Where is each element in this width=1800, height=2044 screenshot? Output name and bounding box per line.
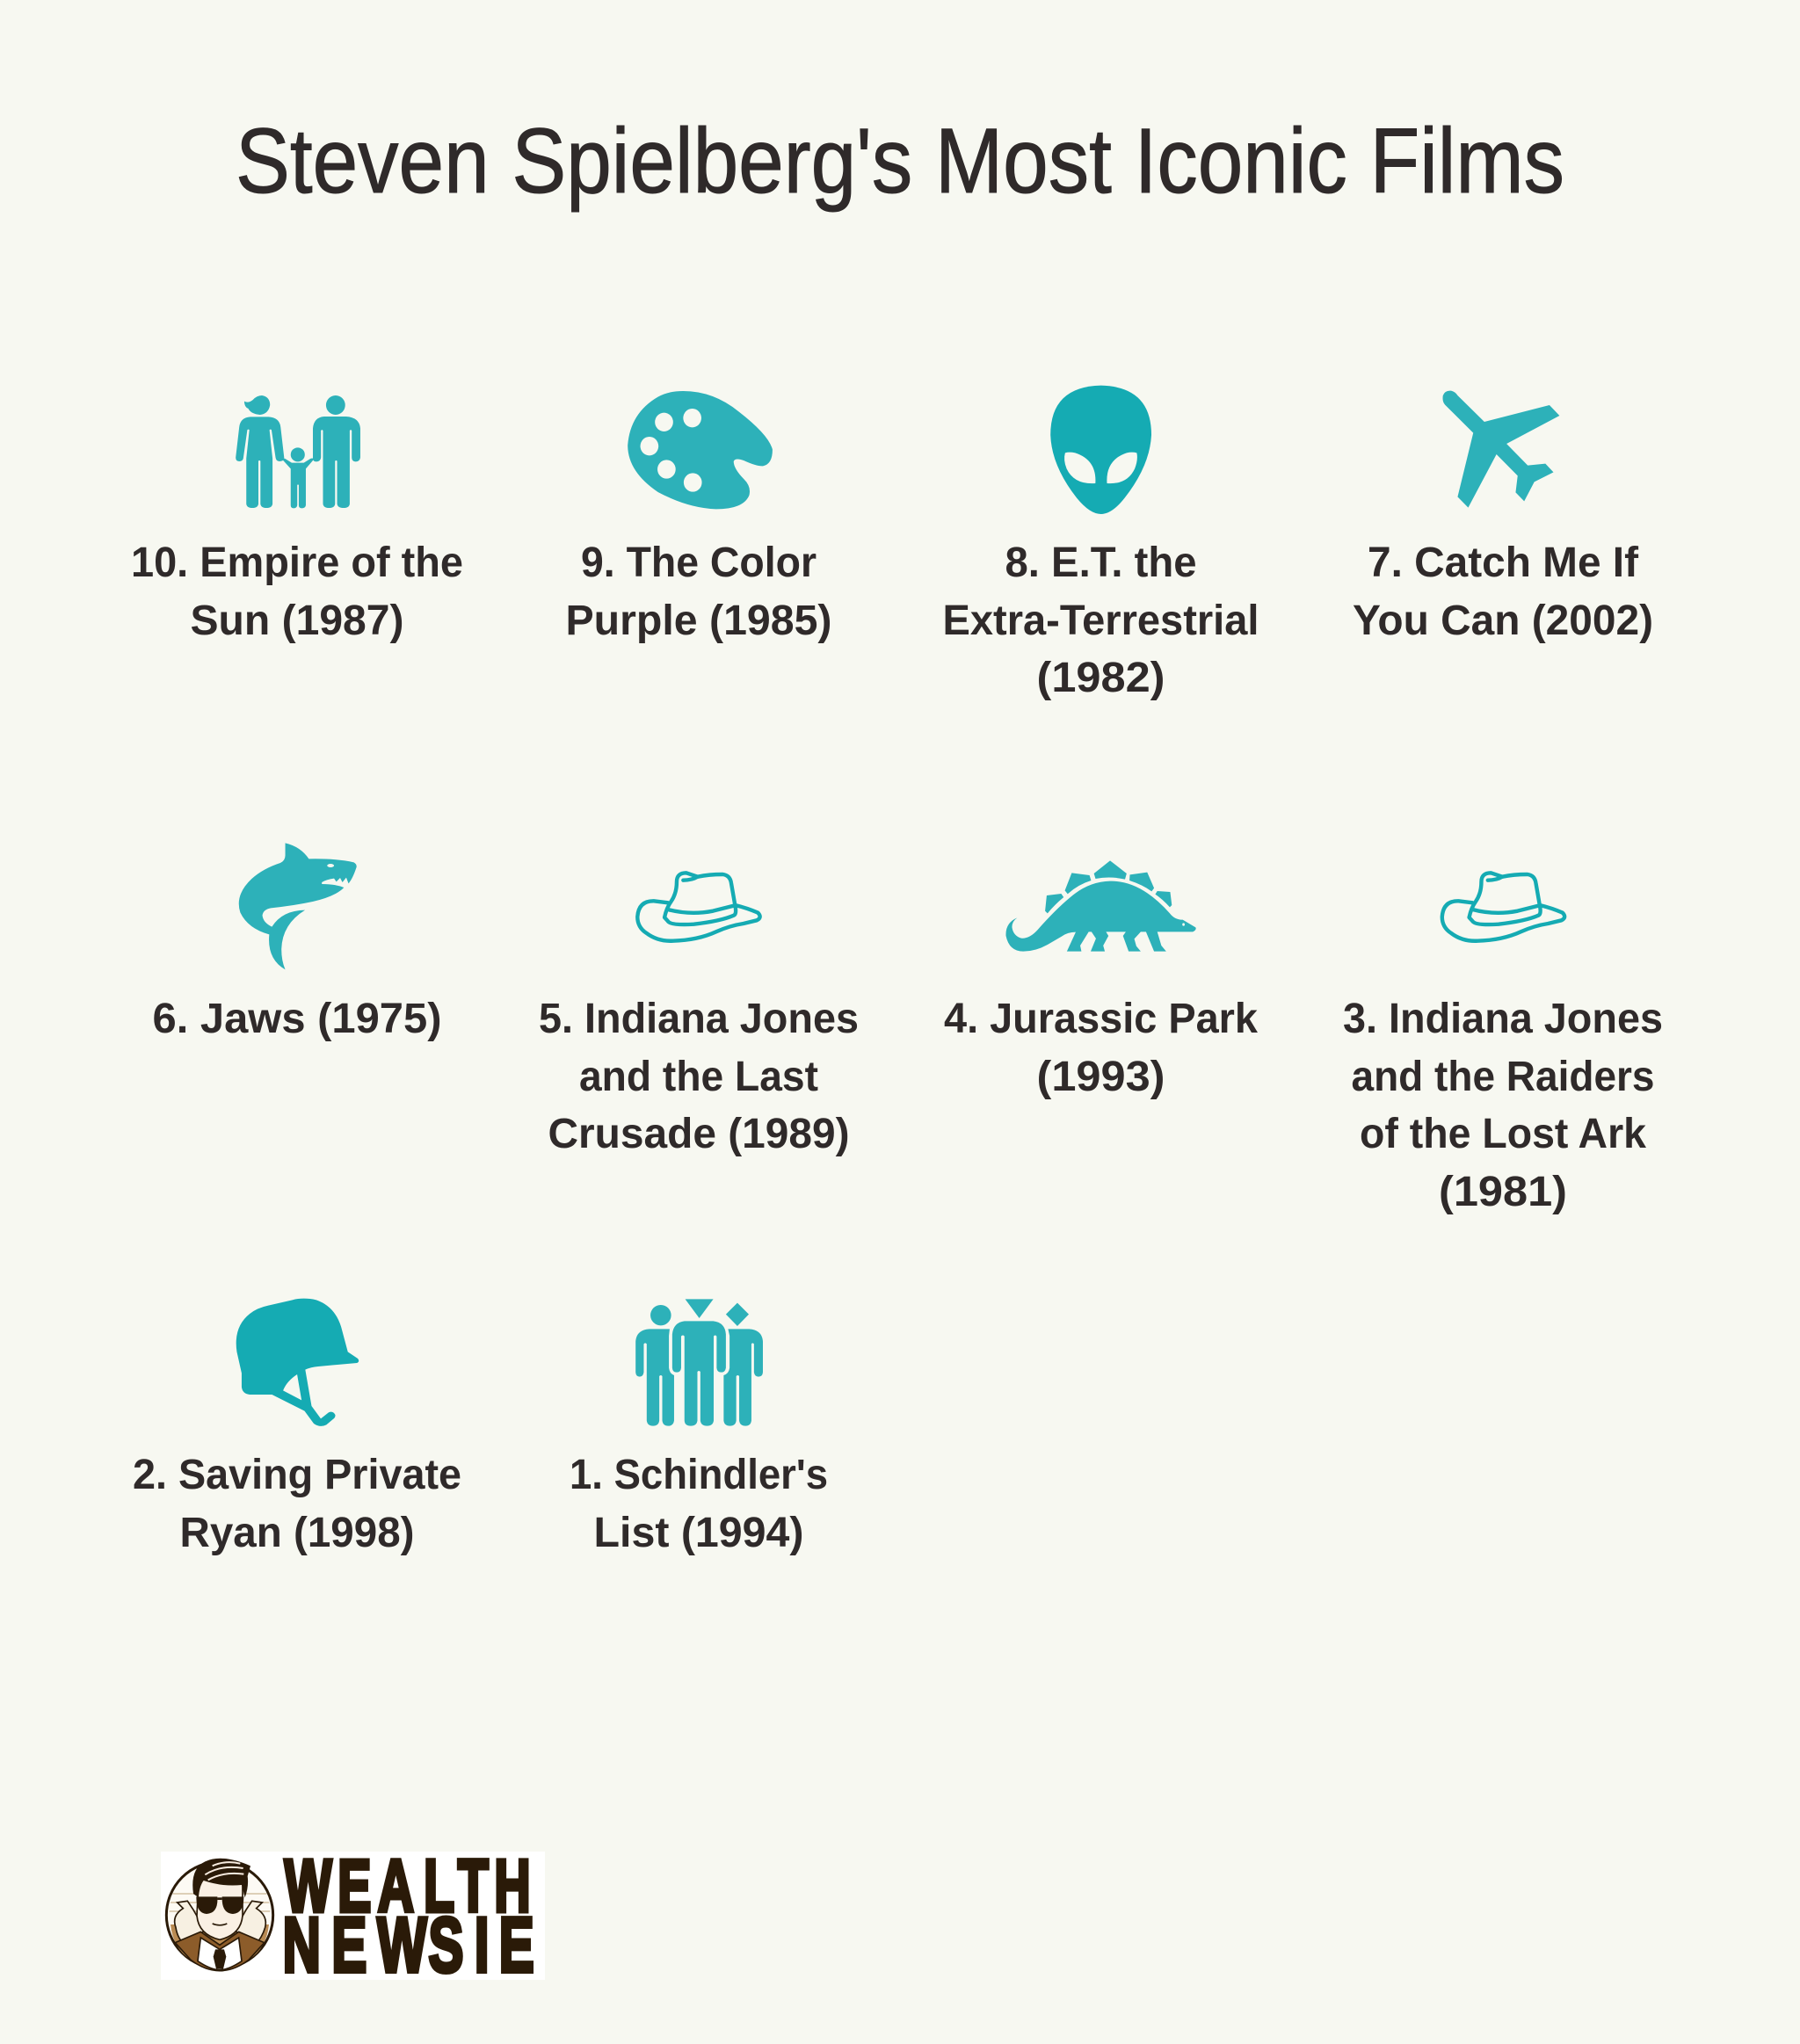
label: film 2: 2. Saving Private	[133, 1452, 461, 1498]
icon: shark	[239, 843, 357, 969]
logo wordmark	[283, 1845, 534, 1988]
label: film 4: 4. Jurassic Park	[944, 996, 1258, 1042]
label: film 5	[539, 996, 859, 1157]
label: film 7: You Can (2002)	[1353, 598, 1653, 644]
label: film 3: 3. Indiana Jones	[1343, 996, 1663, 1042]
panel: film 10	[131, 395, 463, 644]
icon: logo badge	[166, 1859, 273, 1971]
panel: film 6	[153, 843, 441, 1042]
label: film 10	[131, 540, 463, 644]
icon: fedora hat	[637, 873, 760, 941]
panel: film 5	[539, 873, 859, 1157]
label: film 1: List (1994)	[594, 1510, 803, 1556]
logo wordmark: WEALTH	[285, 1845, 531, 1928]
panel: film 2	[133, 1299, 461, 1556]
label: film 2	[133, 1452, 461, 1556]
label: film 6: 6. Jaws (1975)	[153, 996, 441, 1042]
icon: palette	[628, 391, 773, 509]
label: film 4	[944, 996, 1258, 1100]
label: film 8: (1982)	[1037, 655, 1165, 701]
label: film 1	[570, 1452, 828, 1556]
panel: film 7	[1353, 391, 1653, 644]
icon: stegosaurus	[1005, 860, 1196, 952]
logo: Wealth Newsie	[161, 1845, 545, 1988]
panel: film 3	[1343, 873, 1663, 1215]
label: film 1: 1. Schindler's	[570, 1452, 828, 1498]
label: film 9: 9. The Color	[581, 540, 817, 586]
label: film 8: 8. E.T. the	[1005, 540, 1197, 586]
icon: airplane	[1443, 391, 1559, 508]
label: film 5: and the Last	[579, 1054, 818, 1100]
panel: film 9	[566, 391, 831, 644]
icon: alien head	[1050, 386, 1151, 514]
title: Steven Spielberg's Most Iconic Films	[236, 110, 1564, 213]
label: film 3: of the Lost Ark	[1360, 1111, 1646, 1157]
label: film 2: Ryan (1998)	[179, 1510, 415, 1556]
label: film 3: and the Raiders	[1352, 1054, 1654, 1100]
label: film 8	[942, 540, 1259, 701]
label: film 7: 7. Catch Me If	[1368, 540, 1639, 586]
icon: army helmet	[236, 1299, 359, 1426]
label: film 9	[566, 540, 831, 644]
label: film 9: Purple (1985)	[566, 598, 831, 644]
icon: group of people	[635, 1299, 763, 1426]
label: film 10: 10. Empire of the	[131, 540, 463, 586]
label: film 10: Sun (1987)	[190, 598, 404, 644]
label: film 3: (1981)	[1439, 1169, 1567, 1215]
icon: fedora hat	[1442, 873, 1564, 941]
label: film 5: 5. Indiana Jones	[539, 996, 859, 1042]
logo wordmark: NEWSIE	[283, 1902, 534, 1988]
label: film 5: Crusade (1989)	[548, 1111, 849, 1157]
panel: film 1	[570, 1299, 828, 1556]
panel: film 8	[942, 386, 1259, 701]
label: film 3	[1343, 996, 1663, 1215]
label: film 4: (1993)	[1037, 1054, 1165, 1100]
label: film 8: Extra-Terrestrial	[942, 598, 1259, 644]
panel: film 4	[944, 860, 1258, 1100]
icon: family	[236, 395, 360, 508]
label: film 7	[1353, 540, 1653, 644]
